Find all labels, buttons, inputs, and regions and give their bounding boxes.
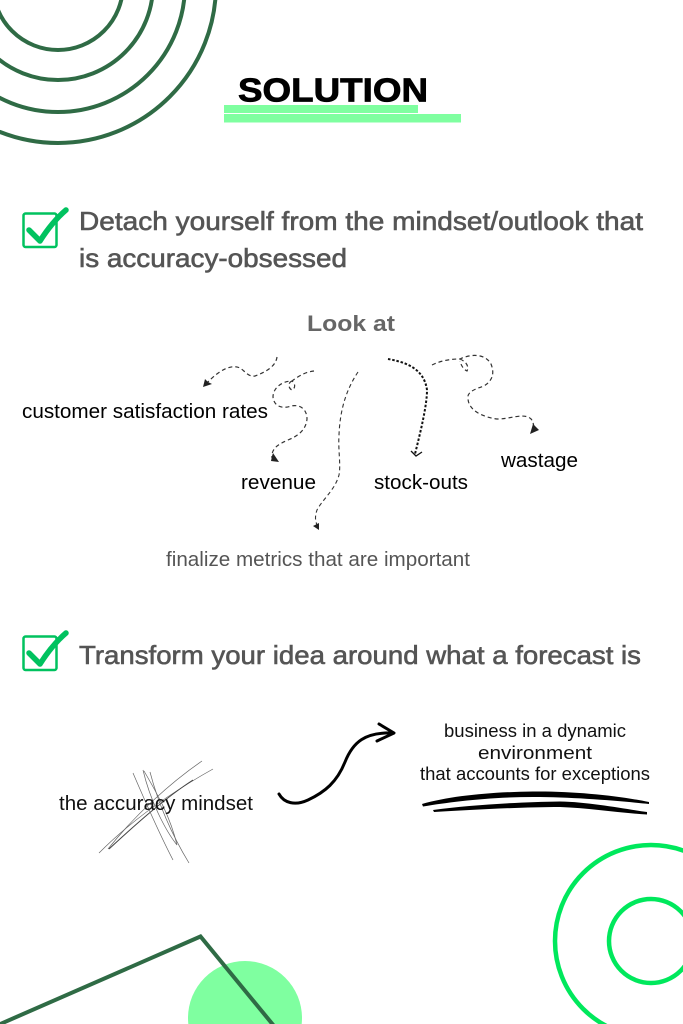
arrow: to customer satisfaction rates [203,357,277,387]
heading 1 [79,206,644,273]
heading 2: Transform your idea around what a forecast is [79,640,641,670]
heading 1: Detach yourself from the mindset/outlook that [79,206,644,236]
label: customer satisfaction rates: customer satisfaction rates [22,401,268,423]
concentric arcs top left [0,0,216,143]
title text: SOLUTION [238,72,428,110]
metric labels [22,401,578,494]
arrow: curved transform arrow [279,724,394,803]
text: business in a dynamic environment [420,721,650,784]
label: stock-outs: stock-outs [374,472,468,494]
bright green concentric circles [555,845,683,1024]
icon: checkbox 1 [24,210,66,247]
heading 1: is accuracy-obsessed [79,243,347,273]
title [224,72,461,122]
arrow: to revenue [271,371,314,462]
look at label: Look at [307,311,396,336]
text: the accuracy mindset: the accuracy mindset [59,793,253,815]
text: business in a dynamic environment: business in a dynamic [444,721,626,741]
finalize metrics text: finalize metrics that are important [166,549,470,571]
icon: checkbox 2 [24,633,66,670]
light green circle [188,961,302,1024]
label: revenue: revenue [241,472,316,494]
crossed out scribble [99,761,213,863]
brush underline [422,791,649,814]
label: wastage: wastage [500,450,578,472]
text: business in a dynamic environment: that accounts for exceptions [420,764,650,784]
arrow: to wastage [432,355,539,434]
text: business in a dynamic environment: environment [478,743,592,763]
arrow: to finalize metrics [313,372,358,530]
title underline bars [224,105,461,122]
dark green angle line [0,936,274,1024]
arrow: to stock-outs [388,359,427,456]
